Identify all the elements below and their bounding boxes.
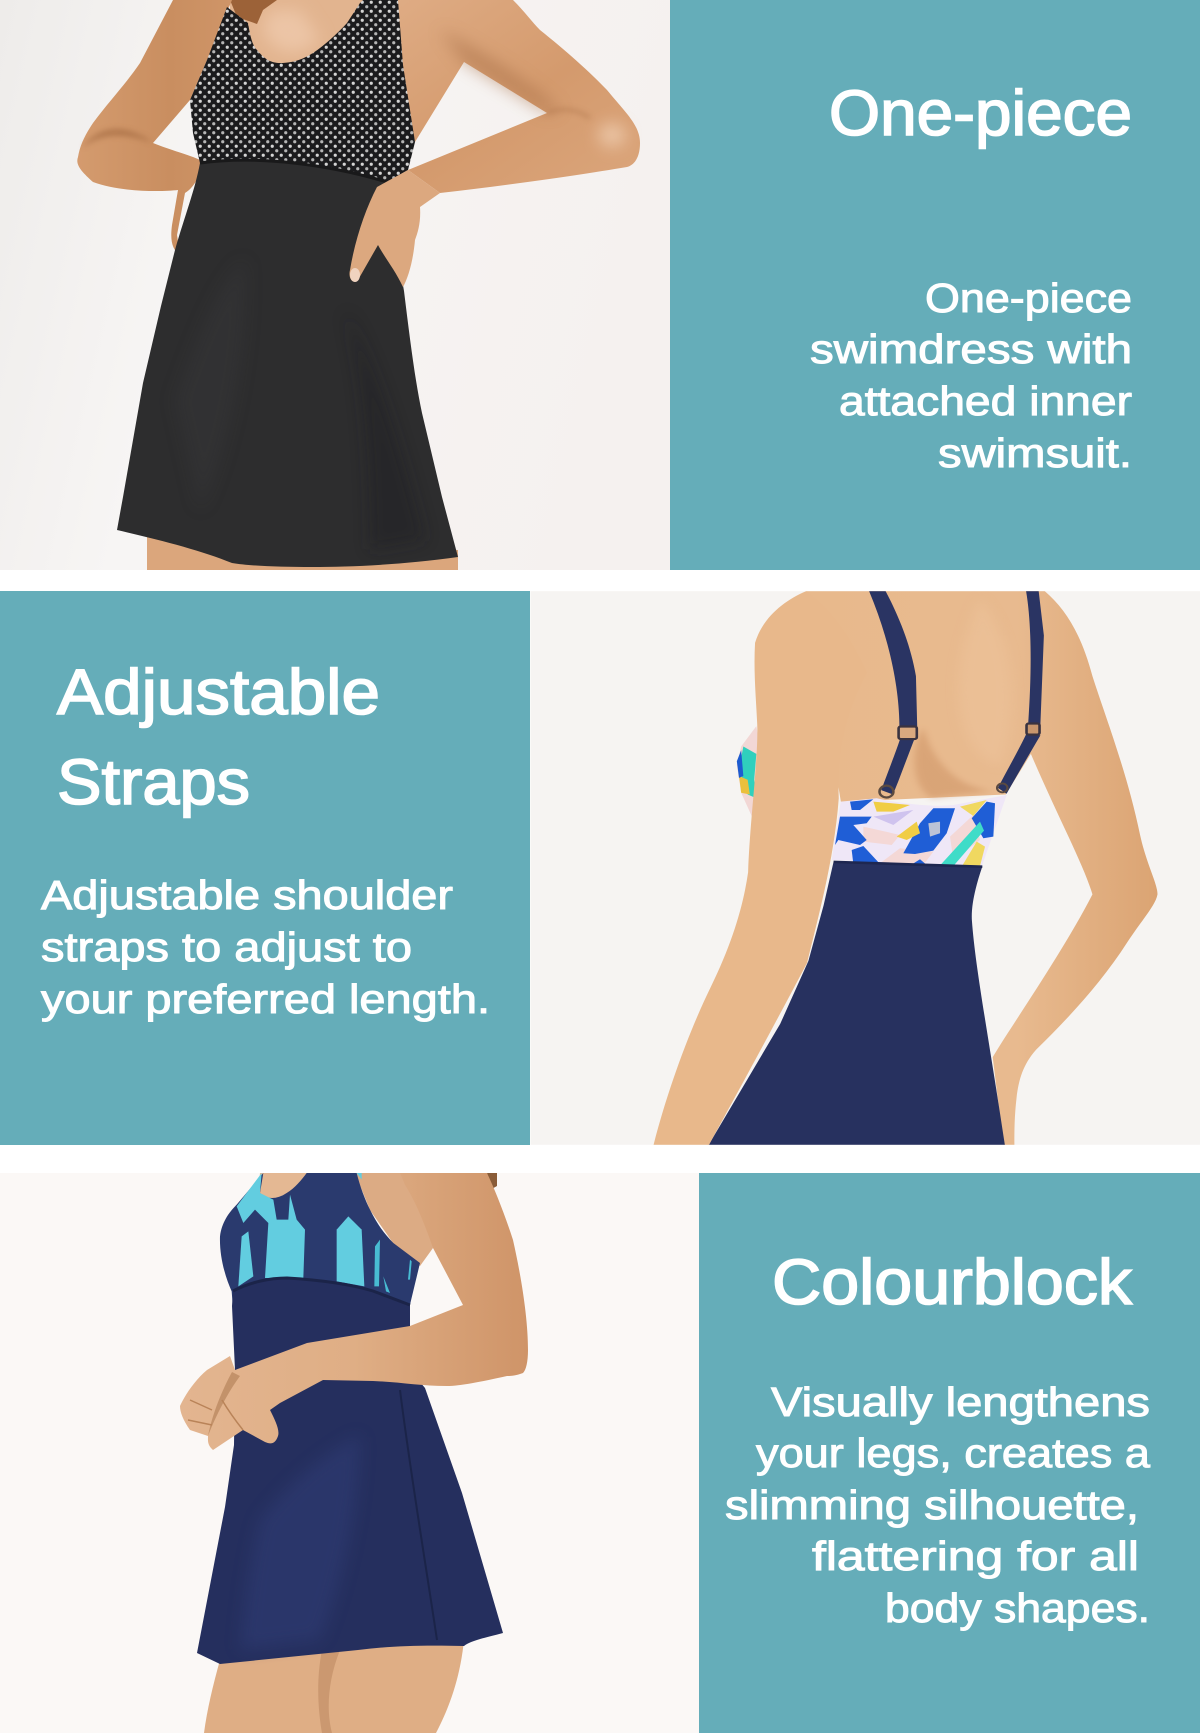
description: one-piece: One-piece (925, 275, 1132, 321)
heading: Adjustable Straps: Adjustable (57, 656, 380, 728)
upper arm, forearm and clasped hands (180, 1173, 528, 1450)
description: one-piece (810, 275, 1132, 476)
left arm (654, 591, 839, 1145)
teal text block: colourblock (699, 1173, 1200, 1733)
description: one-piece: swimsuit. (938, 430, 1132, 476)
printed bodice (220, 1173, 420, 1313)
description: one-piece: swimdress with (810, 326, 1132, 372)
navy skirt (197, 1278, 503, 1664)
panel: one-piece (0, 0, 1200, 570)
printed band (832, 795, 1007, 867)
teal text block: adjustable straps (0, 591, 530, 1145)
description: colourblock: body shapes. (885, 1585, 1150, 1631)
description: colourblock: slimming silhouette, (725, 1482, 1139, 1528)
photo: black polka-dot swimdress (0, 0, 670, 570)
heading: Adjustable Straps: Straps (57, 746, 250, 818)
heading: Adjustable Straps (57, 656, 380, 818)
teal text block: one-piece (670, 0, 1200, 570)
panel: adjustable straps (0, 591, 1200, 1145)
shoulder straps (869, 591, 1044, 798)
heading: One-piece: One-piece (829, 77, 1132, 149)
neck and back skin (260, 1173, 306, 1198)
navy skirt (709, 862, 1005, 1145)
black skirt (117, 160, 458, 567)
front print peek (737, 726, 758, 816)
back and right arm (806, 591, 1157, 1145)
description: colourblock: Visually lengthens (771, 1379, 1150, 1425)
description: adjustable straps: straps to adjust to (41, 924, 412, 970)
panel: colourblock (0, 1173, 1200, 1733)
legs (204, 1640, 464, 1733)
right hand on hip (349, 170, 440, 287)
photo: navy and aqua swimdress side view (0, 1173, 699, 1733)
description: adjustable straps: your preferred length. (41, 976, 490, 1022)
navy sliver (735, 883, 763, 933)
description: colourblock: flattering for all (812, 1533, 1139, 1579)
description: colourblock: your legs, creates a (756, 1430, 1150, 1476)
description: colourblock (725, 1379, 1150, 1631)
dotted bodice (190, 0, 415, 182)
description: adjustable straps: Adjustable shoulder (41, 872, 453, 918)
heading: Colourblock: Colourblock (772, 1246, 1133, 1318)
description: one-piece: attached inner (839, 378, 1132, 424)
description: adjustable straps (41, 872, 490, 1022)
photo: navy swimdress from behind (530, 591, 1200, 1145)
